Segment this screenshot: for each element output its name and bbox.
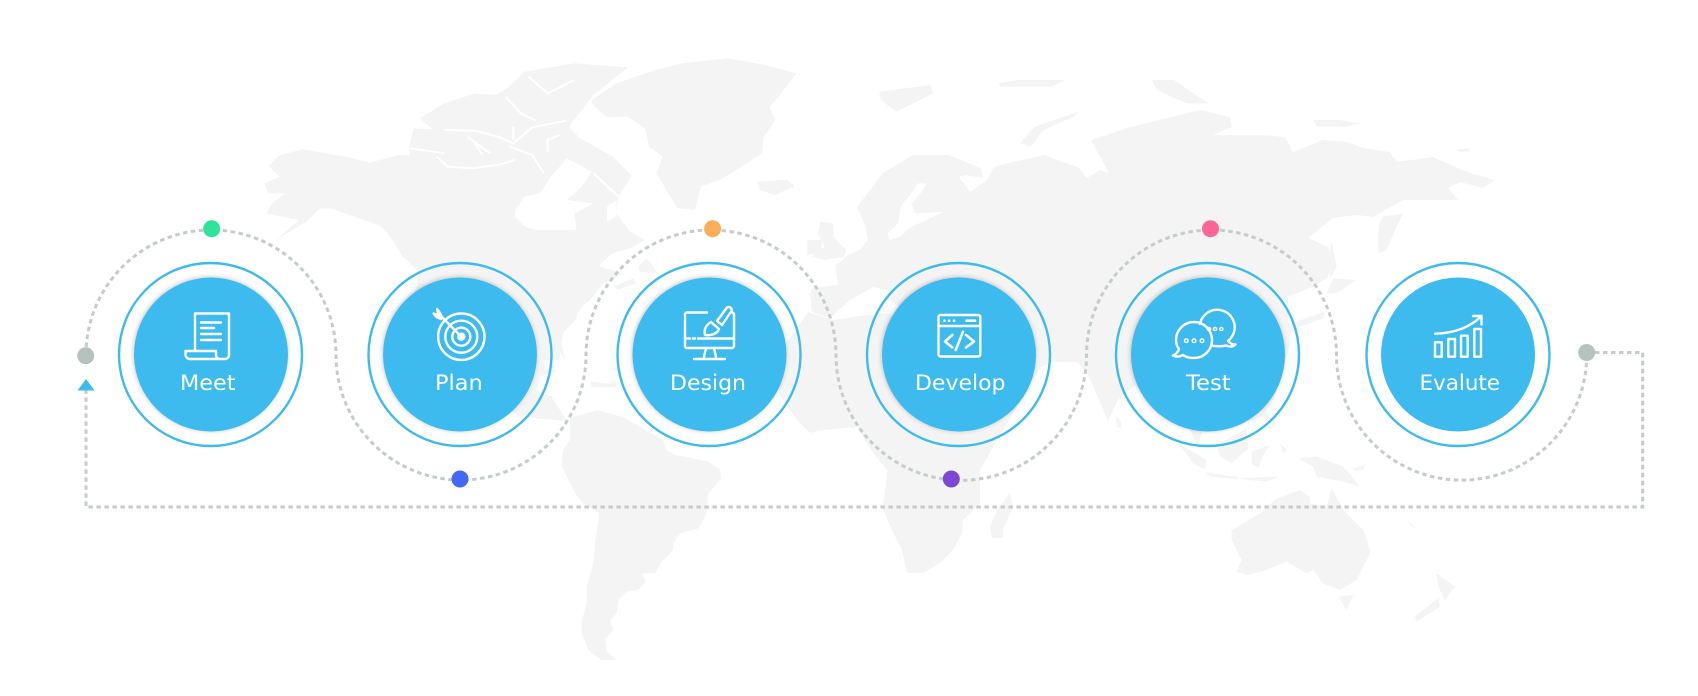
label: Develop	[915, 371, 1006, 396]
node: start grey	[77, 347, 94, 364]
icon: growth bar chart	[1435, 316, 1482, 357]
decorative channels	[410, 77, 618, 197]
node: pink	[1202, 220, 1219, 237]
node: blue	[452, 470, 468, 488]
step: Design	[618, 263, 800, 446]
label: Evalute	[1420, 371, 1500, 396]
node: green	[203, 220, 220, 237]
icon: target with arrow	[434, 309, 484, 360]
step: Evalute	[1366, 263, 1550, 446]
node: purple	[943, 470, 960, 488]
step: Develop	[867, 263, 1050, 446]
node: end grey	[1578, 344, 1595, 361]
dashed connector: return loop	[86, 352, 1643, 507]
icon: scroll document	[186, 314, 229, 359]
dashed connector: serpentine arcs	[86, 230, 1587, 480]
step: Meet	[119, 263, 302, 446]
label: Plan	[435, 371, 483, 396]
world map background	[264, 58, 1495, 660]
icon: chat bubbles	[1173, 310, 1236, 358]
label: Meet	[180, 371, 236, 396]
arrowhead	[78, 379, 94, 390]
node: orange	[704, 220, 721, 237]
label: Test	[1185, 371, 1231, 396]
step: Test	[1116, 263, 1299, 446]
step: Plan	[368, 263, 552, 446]
icon: code window	[938, 315, 980, 356]
icon: monitor with brush	[685, 307, 734, 359]
label: Design	[670, 371, 746, 396]
